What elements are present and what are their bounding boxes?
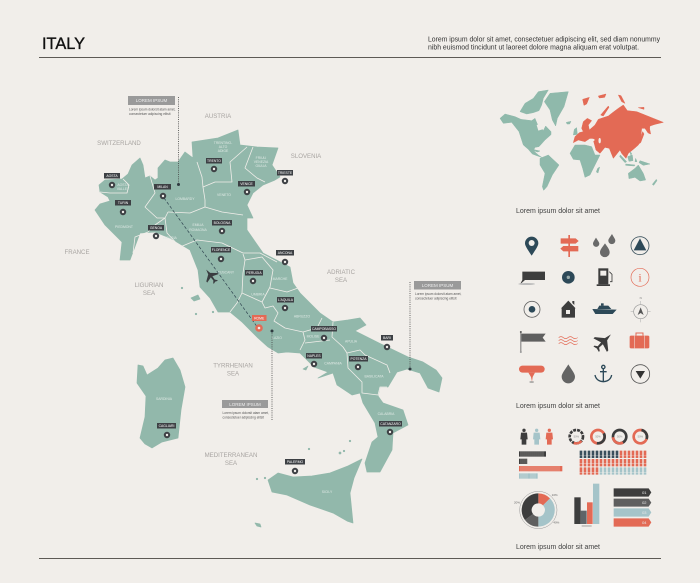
- city: Turin: [115, 200, 131, 215]
- Sardinia: [137, 358, 185, 448]
- region names: SARDINIA: [156, 397, 173, 401]
- region names: GIULIA: [255, 164, 267, 168]
- icon: compass: [631, 296, 651, 322]
- icon: down arrow circle: [631, 365, 650, 383]
- numbered tabs: 04: [642, 520, 647, 525]
- callout: north: consectetuer adipiscing elitsit: [129, 112, 171, 116]
- callout: north: Lorem ipsum dolorsit atam amet,: [129, 108, 176, 112]
- region names: LIGURIA: [163, 236, 178, 240]
- horizontal bars: [519, 451, 562, 479]
- donut percentage charts: [567, 427, 648, 446]
- donut percentage charts: 50%: [638, 435, 644, 439]
- donut percentage charts: 50%: [595, 435, 601, 439]
- region names: FRIULI: [256, 156, 266, 160]
- city: Rome capital: [252, 315, 266, 332]
- region names: TUSCANY: [218, 270, 235, 274]
- city: Naples: NAPLES: [307, 354, 321, 358]
- icon: warning circle: [631, 237, 649, 255]
- title: ITALY: [42, 34, 85, 53]
- neighbouring country and sea labels: ADRIATIC: [327, 269, 356, 276]
- icon: disc: [562, 271, 575, 284]
- callout: south: [222, 330, 274, 420]
- icon: oil drop: [562, 364, 575, 383]
- city: Trieste: [277, 170, 293, 184]
- city: Trento: TRENTO: [207, 159, 221, 163]
- callout: east: [408, 281, 462, 370]
- callout: south: Lorem ipsum dolorsit atam amet,: [222, 411, 269, 415]
- region names: APULIA: [345, 340, 358, 344]
- header description: nibh euismod tincidunt ut laoreet dolore magna aliquam erat volutpat.: [428, 44, 639, 52]
- header description: [428, 36, 660, 52]
- caption: icons: Lorem ipsum dolor sit amet: [516, 401, 600, 410]
- small islands: [181, 287, 351, 527]
- region names: UMBRIA: [251, 292, 265, 296]
- city: Potenza: [349, 356, 368, 370]
- icon: compass: N: [640, 296, 642, 300]
- icon: waves: [559, 337, 578, 345]
- infographic set: [514, 427, 651, 529]
- neighbouring country and sea labels: SEA: [225, 460, 238, 467]
- map of Italy: [95, 130, 442, 527]
- icon: location pin: [525, 237, 538, 256]
- region names: ALTO: [219, 145, 228, 149]
- city: Catanzaro: CATANZARO: [380, 422, 401, 426]
- callout: south: LOREM IPSUM: [229, 402, 261, 407]
- numbered tabs: 02: [642, 500, 647, 505]
- Sicily: [268, 459, 362, 523]
- neighbouring country and sea labels: AUSTRIA: [205, 113, 232, 120]
- city: Bologna: BOLOGNA: [214, 221, 231, 225]
- neighbouring country and sea labels: MEDITERRANEAN: [205, 452, 257, 459]
- neighbouring country and sea labels: [64, 113, 356, 467]
- people grid: [581, 451, 645, 475]
- region names: VENETO: [217, 193, 231, 197]
- city: Venice: VENICE: [240, 182, 254, 186]
- region names: AOSTA: [117, 183, 129, 187]
- city: Bari: [381, 335, 393, 350]
- callout: south: consectetuer adipiscing elitsit: [222, 416, 264, 420]
- donut percentage charts: 50%: [574, 435, 580, 439]
- city: Aosta: AOSTA: [106, 174, 118, 178]
- icon set: [518, 234, 651, 383]
- city: Milan: [154, 184, 171, 199]
- Hudson Bay: [537, 123, 542, 131]
- city: Florence: FLORENCE: [212, 248, 231, 252]
- region names: LAZIO: [272, 336, 282, 340]
- region names: TRENTINO-: [214, 141, 232, 145]
- city: Naples: [306, 353, 322, 367]
- neighbouring country and sea labels: SEA: [143, 290, 156, 297]
- region names: LOMBARDY: [175, 197, 195, 201]
- icon: ship: [592, 303, 617, 314]
- city: Aosta: [104, 173, 120, 188]
- donut pie chart: 20%: [514, 501, 520, 505]
- city: Trieste: TRIESTE: [278, 171, 293, 175]
- city: Cagliari: [157, 423, 176, 438]
- city: Bologna: [212, 220, 232, 234]
- city: Cagliari: CAGLIARI: [159, 424, 174, 428]
- city: Campobasso: [311, 326, 337, 341]
- icon: airplane: [589, 328, 618, 356]
- region names: CAMPANIA: [324, 362, 342, 366]
- neighbouring country and sea labels: LIGURIAN: [135, 282, 163, 289]
- city: Palermo: [285, 459, 305, 474]
- callout: east: consectetuer adipiscing elitsit: [415, 296, 457, 300]
- region names: SICILY: [322, 490, 333, 494]
- region names: CALABRIA: [378, 412, 395, 416]
- city: Ancona: ANCONA: [278, 251, 293, 255]
- region names: PIEDMONT: [115, 225, 133, 229]
- region names: ABRUZZO: [294, 314, 310, 318]
- region names: MARCHE: [273, 277, 288, 281]
- neighbouring country and sea labels: TYRRHENIAN: [213, 362, 253, 370]
- city: Palermo: PALERMO: [287, 460, 304, 464]
- city: L'Aquila: [277, 297, 294, 311]
- donut percentage charts: 50%: [617, 435, 623, 439]
- neighbouring country and sea labels: SLOVENIA: [291, 153, 322, 160]
- city: Turin: TURIN: [118, 201, 129, 205]
- city: Milan: MILAN: [157, 185, 168, 189]
- caption: world map: Lorem ipsum dolor sit amet: [516, 206, 600, 215]
- icon: speech bubble: [518, 272, 545, 285]
- region names: MOLISE: [307, 334, 320, 338]
- city: L'Aquila: L'AQUILA: [278, 298, 294, 302]
- icon: red map pin: [519, 366, 545, 383]
- region names: ROMAGNA: [189, 228, 207, 232]
- header description: Lorem ipsum dolor sit amet, consectetuer adipiscing elit, sed diam nonummy: [428, 36, 660, 44]
- region names: ADIGE: [218, 149, 229, 153]
- icon: water drops: [593, 234, 615, 257]
- icon: house: [561, 301, 576, 318]
- city: Genoa: [148, 225, 164, 239]
- people icons: [520, 429, 553, 445]
- callout: north: LOREM IPSUM: [136, 98, 167, 103]
- city: Genoa: GENOA: [150, 226, 163, 230]
- icon: info circle: i: [638, 271, 642, 285]
- neighbouring country and sea labels: SWITZERLAND: [97, 140, 141, 147]
- icon: info circle: [631, 268, 649, 286]
- caption: infographics: Lorem ipsum dolor sit amet: [516, 542, 600, 551]
- region names: [115, 141, 395, 494]
- city: Campobasso: CAMPOBASSO: [312, 327, 336, 331]
- region names: VENEZIA: [254, 160, 269, 164]
- region borders: [100, 147, 390, 395]
- icon: signpost: [560, 235, 579, 257]
- city: Bari: BARI: [383, 336, 391, 340]
- world map: [500, 90, 663, 190]
- icon: plane: [201, 265, 221, 287]
- donut pie chart: [514, 491, 560, 529]
- callout: east: Lorem ipsum dolorsit atam amet,: [415, 292, 462, 296]
- region names: VALLEY: [117, 187, 130, 191]
- donut pie chart: 10%: [552, 493, 558, 497]
- city: Perugia: [245, 270, 263, 284]
- highlighted Eurasia: [573, 94, 663, 158]
- numbered tabs: 03: [642, 510, 647, 515]
- icon: suitcase: [630, 333, 649, 348]
- column chart: [574, 484, 599, 526]
- city: Venice: [238, 181, 255, 195]
- city: Perugia: PERUGIA: [246, 271, 262, 275]
- inland seas: [589, 138, 601, 143]
- neighbouring country and sea labels: SEA: [227, 370, 240, 378]
- Americas, Africa and Oceania: [500, 90, 657, 190]
- donut pie chart: 40%: [553, 520, 560, 524]
- flight path: [164, 198, 258, 328]
- city: Ancona: [276, 250, 294, 265]
- city: Trento: [206, 158, 222, 172]
- callout: east: LOREM IPSUM: [422, 283, 453, 288]
- icon: target: [524, 301, 540, 317]
- mainland: [95, 130, 442, 472]
- icon: anchor: [595, 365, 612, 382]
- numbered tabs: [614, 488, 651, 527]
- neighbouring country and sea labels: FRANCE: [64, 249, 90, 256]
- city: Rome capital: ROME: [254, 316, 265, 320]
- numbered tabs: 01: [642, 490, 647, 495]
- callout: north: [128, 96, 180, 186]
- region names: BASILICATA: [364, 374, 384, 378]
- icon: flag: [520, 331, 546, 353]
- city: Florence: [211, 247, 231, 262]
- city: Potenza: POTENZA: [350, 357, 367, 361]
- icon: fuel pump: [597, 268, 612, 286]
- neighbouring country and sea labels: SEA: [335, 277, 348, 284]
- region names: EMILIA: [192, 223, 204, 227]
- city: Catanzaro: [379, 421, 402, 435]
